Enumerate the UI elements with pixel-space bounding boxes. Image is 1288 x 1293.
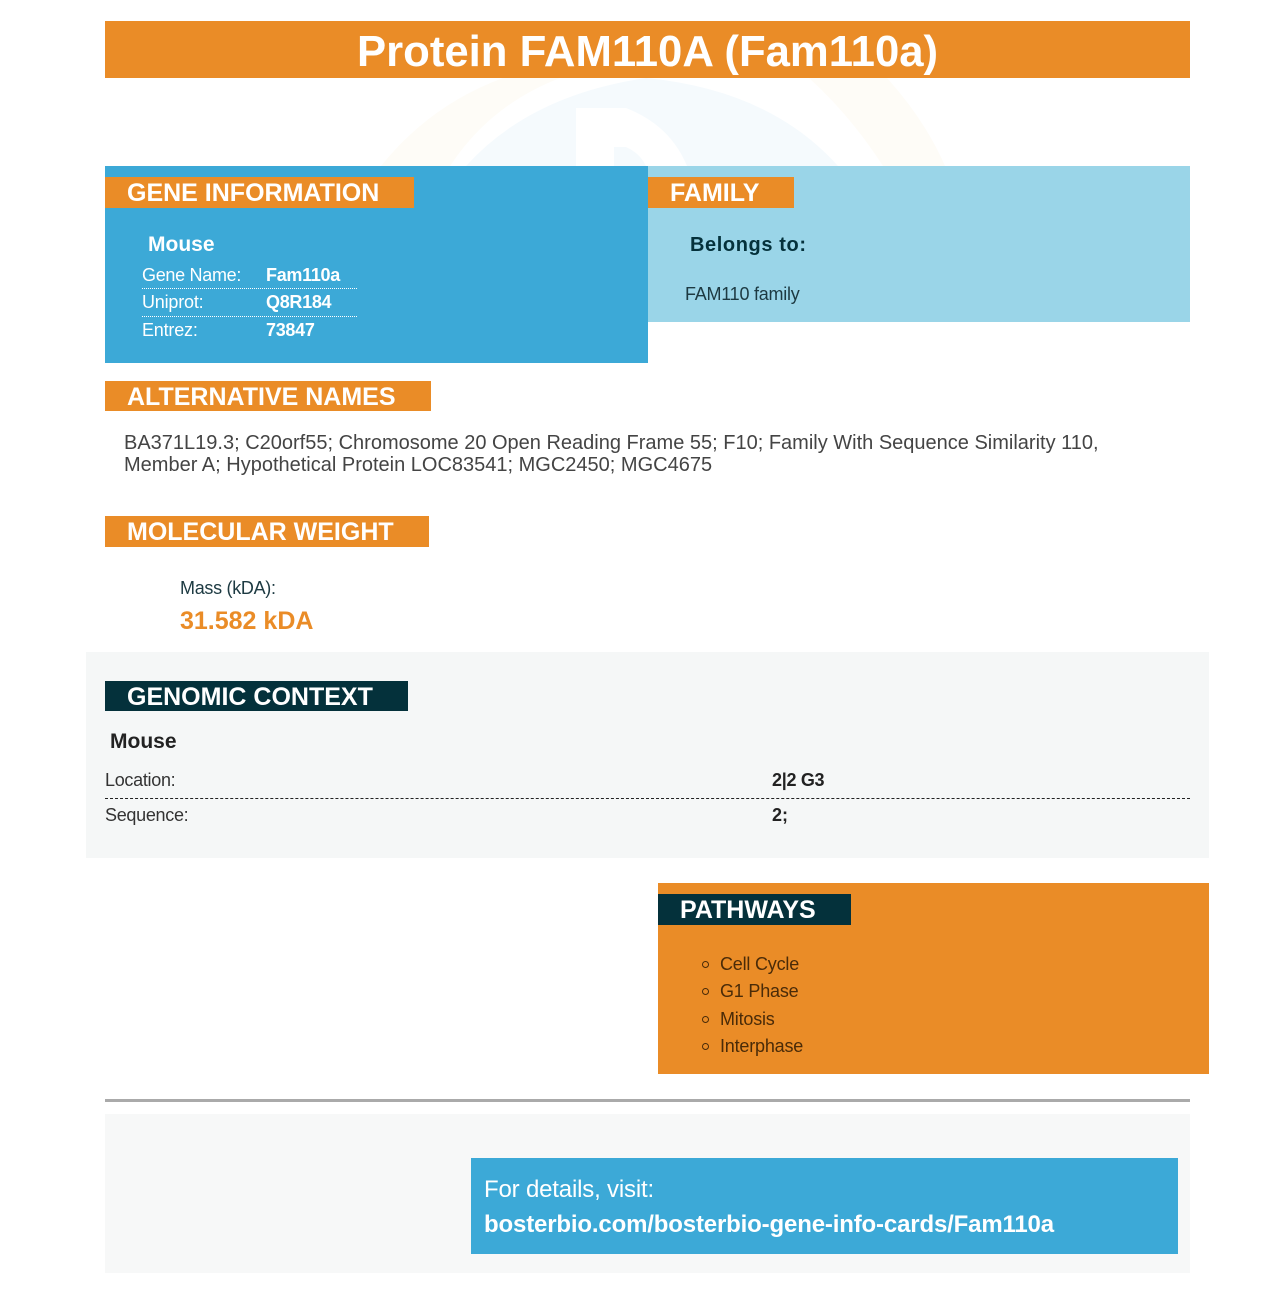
alternative names text (124, 432, 1099, 476)
panel: family (648, 166, 1190, 322)
alternative names text: BA371L19.3; C20orf55; Chromosome 20 Open Reading Frame 55; F10; Family With Sequence Similarity 110, (124, 432, 1099, 454)
heading: alternative names: ALTERNATIVE NAMES (127, 383, 396, 411)
mass value: 31.582 kDA (180, 607, 313, 635)
title banner (105, 21, 1190, 78)
pathways list (702, 954, 803, 1056)
divider line (105, 1099, 1190, 1102)
bullet (702, 988, 709, 995)
location row: 2|2 G3 (772, 770, 824, 790)
panel: pathways (658, 883, 1209, 1074)
list item: G1 Phase (720, 981, 798, 1001)
location row: Location: (105, 770, 175, 790)
heading: genomic context: GENOMIC CONTEXT (127, 683, 373, 711)
heading: family (648, 177, 794, 208)
heading: molecular weight: MOLECULAR WEIGHT (127, 518, 394, 546)
gene name row: Fam110a (266, 265, 340, 285)
gene name row: Gene Name: (142, 265, 241, 285)
sequence row: Sequence: (105, 805, 188, 825)
species: mouse: Mouse (148, 233, 215, 256)
list item: Cell Cycle (720, 954, 799, 974)
species: mouse: Mouse (110, 730, 177, 753)
uniprot row: Q8R184 (266, 292, 331, 312)
uniprot row: Uniprot: (142, 292, 203, 312)
heading: family: FAMILY (670, 179, 759, 207)
panel: gene information (105, 166, 648, 363)
callout label: For details, visit: (484, 1176, 654, 1203)
callout url: bosterbio.com/bosterbio-gene-info-cards/Fam110a (484, 1211, 1054, 1238)
list item: Mitosis (720, 1009, 775, 1029)
heading: pathways: PATHWAYS (680, 896, 816, 924)
panel: genomic context (86, 652, 1209, 858)
entrez row: 73847 (266, 320, 315, 340)
belongs to label: Belongs to: (690, 234, 807, 256)
callout: details link (471, 1158, 1178, 1254)
entrez row: Entrez: (142, 320, 198, 340)
heading: pathways (658, 894, 851, 925)
footer panel (105, 1114, 1190, 1273)
sequence row (105, 805, 788, 825)
bullet (702, 961, 709, 968)
watermark logo (466, 78, 838, 166)
alternative names text: Member A; Hypothetical Protein LOC83541; MGC2450; MGC4675 (124, 454, 712, 476)
bullet (702, 1043, 709, 1050)
uniprot row (142, 289, 357, 317)
mass label: Mass (kDA): (180, 578, 276, 598)
sequence row: 2; (772, 805, 788, 825)
family value: FAM110 family (685, 284, 799, 304)
bullet (702, 1016, 709, 1023)
gene name row (142, 261, 357, 289)
title: Protein FAM110A (Fam110a) (357, 27, 938, 76)
heading: gene information: GENE INFORMATION (127, 179, 379, 207)
location row (105, 766, 1190, 799)
list item: Interphase (720, 1036, 803, 1056)
entrez row (142, 320, 315, 340)
